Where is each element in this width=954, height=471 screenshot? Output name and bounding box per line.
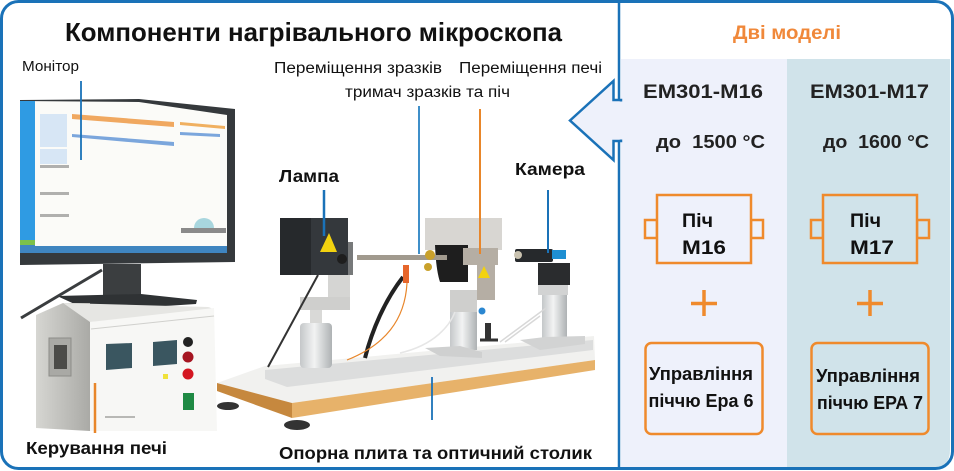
- furnace control box EPA 7: піччю ЕРА 7: [817, 392, 923, 413]
- furnace M17 icon: М17: [850, 237, 894, 259]
- model 2 temperature: до 1600 °C: [823, 132, 929, 152]
- leader: monitor: [80, 81, 82, 160]
- panel: right models background: [621, 59, 950, 469]
- furnace control box EPA 7: [812, 343, 928, 434]
- label: camera: Камера: [515, 159, 585, 179]
- label: sample holder and furnace: тримач зразків та піч: [345, 84, 510, 101]
- heading: two models: Дві моделі: [733, 23, 841, 44]
- furnace M17 icon: [811, 195, 929, 263]
- furnace control box Epa 6: [646, 343, 762, 434]
- furnace M16 icon: М16: [682, 237, 726, 259]
- arrow pointing to microscope: [570, 81, 621, 160]
- label: sample movement: Переміщення зразків: [274, 60, 442, 77]
- leader: lamp: [323, 190, 325, 236]
- plus 2: [857, 290, 883, 316]
- furnace control box Epa 6: Управління: [649, 363, 753, 384]
- camera assembly: [500, 249, 585, 350]
- leader: furnace movement: [479, 109, 481, 254]
- label: furnace movement: Переміщення печі: [459, 60, 602, 77]
- furnace control box: [36, 303, 217, 431]
- label: support plate and optical table: Опорна плита та оптичний столик: [279, 443, 592, 463]
- plus 1: [691, 290, 717, 316]
- title: Компоненти нагрівального мікроскопа: [65, 17, 563, 47]
- model 1 name: ЕМ301-М16: [643, 82, 763, 103]
- label: furnace control: Керування печі: [26, 438, 167, 458]
- furnace control box EPA 7: Управління: [816, 365, 920, 386]
- furnace M17 icon: Піч: [850, 210, 881, 232]
- orange leader: furnace control: [94, 383, 96, 433]
- model 1 temperature: до 1500 °C: [656, 132, 765, 152]
- label: lamp: Лампа: [279, 166, 339, 186]
- furnace M16 icon: Піч: [682, 210, 713, 232]
- furnace control box Epa 6: піччю Ера 6: [648, 390, 754, 411]
- leader: sample movement: [418, 106, 420, 254]
- lamp assembly: [268, 218, 353, 368]
- furnace M16 icon: [645, 195, 763, 263]
- label: monitor: Монітор: [22, 58, 79, 75]
- sample holder and furnace: [347, 218, 502, 360]
- leader: optical table: [431, 377, 433, 420]
- monitor: [20, 99, 235, 318]
- leader: camera: [547, 190, 549, 253]
- model 2 name: ЕМ301-М17: [810, 82, 929, 103]
- support plate and optical table: [217, 336, 595, 430]
